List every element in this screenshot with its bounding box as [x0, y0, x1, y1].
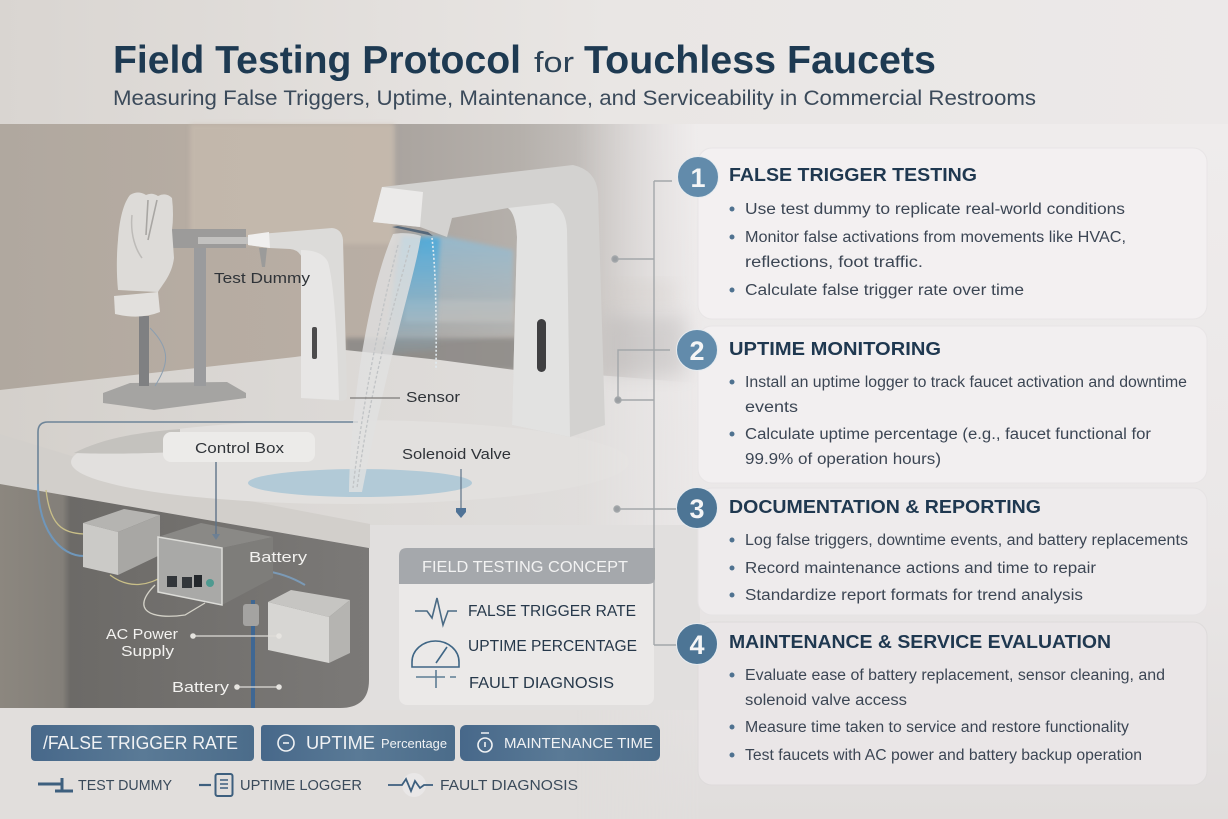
metric pill: maintenance time	[460, 725, 660, 761]
title: Field Testing Protocol	[113, 39, 521, 82]
metric pill: uptime percentage: Percentage	[381, 736, 447, 751]
heading 2: UPTIME MONITORING	[729, 339, 941, 359]
label: solenoid valve	[402, 446, 511, 518]
metric pill: false trigger rate	[31, 725, 254, 761]
label: AC power supply: Supply	[121, 643, 175, 660]
badge 1: 1	[690, 163, 706, 193]
label: sensor	[350, 389, 460, 406]
label: battery top: Battery	[249, 549, 308, 566]
badge 2	[676, 330, 718, 370]
panel: step 4 maintenance and service evaluation	[676, 622, 1207, 785]
icon: control box	[158, 523, 273, 605]
photo scene: restroom wall, counter and sink	[0, 124, 720, 548]
metric pill: uptime percentage	[261, 725, 455, 761]
concept header	[399, 548, 655, 584]
panel: step 1 false trigger testing	[678, 148, 1207, 319]
light panel around concept box	[370, 525, 700, 710]
metric pill: false trigger rate: /FALSE TRIGGER RATE	[43, 733, 238, 753]
label: AC power supply	[106, 626, 282, 660]
under-counter cabinet with components	[0, 422, 369, 708]
test dummy rig	[103, 192, 248, 410]
bullets 4: Test faucets with AC power and battery backup operation	[745, 747, 1142, 764]
heading 3: DOCUMENTATION & REPORTING	[729, 497, 1041, 517]
heading 1: FALSE TRIGGER TESTING	[729, 165, 977, 185]
badge 3	[676, 488, 718, 528]
bullets 4: solenoid valve access	[745, 692, 907, 709]
subtitle: Measuring False Triggers, Uptime, Maintenance, and Serviceability in Commercial Restrooms	[113, 87, 1036, 110]
bullets 3: Record maintenance actions and time to repair	[745, 560, 1096, 577]
label: AC power supply: AC Power	[106, 626, 178, 643]
title	[113, 39, 936, 82]
connector lines	[612, 181, 678, 645]
concept header: FIELD TESTING CONCEPT	[422, 559, 629, 576]
bullets 2: events	[745, 399, 798, 416]
label: control box	[163, 432, 315, 540]
label: battery bottom: Battery	[172, 679, 230, 696]
bullets 1: reflections, foot traffic.	[745, 254, 923, 271]
bullets 2: 99.9% of operation hours)	[745, 451, 941, 468]
bullets 2: Calculate uptime percentage (e.g., faucet functional for	[745, 426, 1151, 443]
counter front edge and sink	[0, 420, 629, 548]
icon: battery box	[268, 590, 350, 663]
label: solenoid valve: Solenoid Valve	[402, 446, 511, 463]
bullets 4	[730, 667, 1165, 764]
water stream with sensor beam	[349, 233, 513, 492]
badge 4: 4	[689, 630, 705, 660]
icon: mannequin hand	[114, 192, 174, 317]
label: control box: Control Box	[195, 440, 285, 457]
badge 2: 2	[689, 336, 705, 366]
concept item: fault diagnosis: FAULT DIAGNOSIS	[469, 675, 614, 692]
label: sensor: Sensor	[406, 389, 460, 406]
label: battery bottom	[172, 679, 282, 696]
panel: step 3 documentation and reporting	[676, 488, 1207, 615]
legend: fault diagnosis	[388, 773, 578, 797]
concept item: uptime percentage: UPTIME PERCENTAGE	[468, 638, 637, 655]
icon: solenoid clamp	[243, 604, 259, 626]
icon: pulse	[415, 598, 457, 625]
bullets 2: Install an uptime logger to track faucet activation and downtime	[745, 374, 1187, 391]
badge 3: 3	[689, 494, 705, 524]
metric pill: maintenance time: MAINTENANCE TIME	[504, 735, 653, 752]
bullets 4: Measure time taken to service and restore functionality	[745, 719, 1129, 736]
metric pill: uptime percentage: UPTIME	[306, 733, 375, 753]
legend: test dummy	[38, 778, 172, 794]
right side background fading over the scene	[600, 124, 1228, 616]
icon: junction box	[83, 509, 160, 575]
panel: step 2 uptime monitoring	[676, 326, 1207, 483]
small faucet	[248, 228, 347, 401]
bullets 1: Use test dummy to replicate real-world conditions	[745, 201, 1125, 218]
wiring	[38, 422, 358, 708]
legend: uptime logger	[199, 774, 362, 796]
large faucet	[373, 165, 605, 437]
bullets 3: Standardize report formats for trend analysis	[745, 587, 1083, 604]
header band	[0, 0, 1228, 124]
title: Touchless Faucets	[584, 39, 936, 82]
badge 4	[676, 624, 718, 664]
heading 4: MAINTENANCE & SERVICE EVALUATION	[729, 632, 1111, 652]
concept item: false trigger rate: FALSE TRIGGER RATE	[468, 603, 636, 620]
bullets 2	[730, 374, 1187, 468]
legend: uptime logger: UPTIME LOGGER	[240, 778, 362, 794]
legend: fault diagnosis: FAULT DIAGNOSIS	[440, 778, 578, 794]
legend: test dummy: TEST DUMMY	[78, 778, 172, 794]
bullets 1: Monitor false activations from movements like HVAC,	[745, 229, 1126, 246]
bullets 4: Evaluate ease of battery replacement, sensor cleaning, and	[745, 667, 1165, 684]
bullets 1	[730, 201, 1126, 299]
bullets 1: Calculate false trigger rate over time	[745, 282, 1024, 299]
badge 1	[678, 156, 718, 198]
title: for	[534, 47, 574, 79]
bullets 3	[730, 532, 1188, 604]
icon: gauge	[412, 641, 459, 688]
label: test dummy: Test Dummy	[214, 270, 311, 287]
bullets 3: Log false triggers, downtime events, and battery replacements	[745, 532, 1188, 549]
panel: field testing concept	[399, 548, 655, 705]
